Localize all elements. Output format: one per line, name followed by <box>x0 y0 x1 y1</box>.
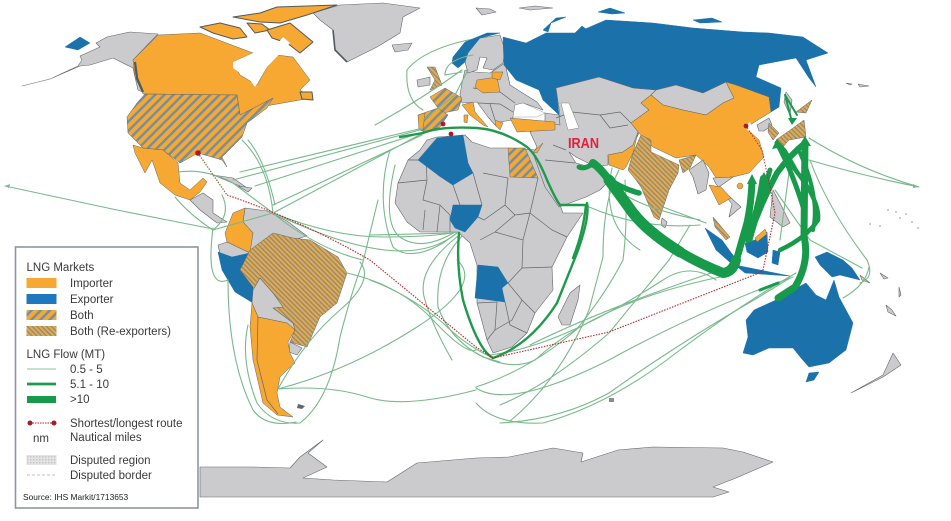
heading: LNG Markets: LNG Markets <box>26 262 94 274</box>
legend: flow over 10: >10 <box>70 394 90 406</box>
region: Oceania <box>609 209 919 402</box>
legend: disputed region: Disputed region <box>70 455 151 467</box>
legend: flow 5.1-10 <box>27 379 109 391</box>
legend: flow over 10 <box>27 394 90 406</box>
region: Russia <box>503 8 869 115</box>
legend: disputed border <box>27 470 152 482</box>
legend: nautical miles: Nautical miles <box>70 432 142 444</box>
region: Antarctica <box>200 440 773 497</box>
legend: exporter: Exporter <box>70 294 114 306</box>
legend: flow 5.1-10: 5.1 - 10 <box>70 379 109 391</box>
legend: nautical miles: nm <box>33 433 49 445</box>
legend: both: Both <box>70 310 94 322</box>
region: Africa <box>395 135 583 353</box>
shortest and longest route, dotted <box>198 126 775 358</box>
legend: both re-exporters <box>26 326 171 338</box>
flow arrowheads <box>5 118 919 188</box>
region: Asia <box>510 77 870 283</box>
legend panel <box>16 247 198 508</box>
source note: Source: IHS Markit/1713653 <box>23 492 129 502</box>
region: North America <box>22 3 420 223</box>
legend: importer: Importer <box>70 278 113 290</box>
legend: both re-exporters: Both (Re-exporters) <box>70 326 171 338</box>
LNG flow routes, thick over 10 MT <box>579 95 818 298</box>
region: Europe <box>417 6 553 132</box>
label: Iran: IRAN <box>568 136 599 152</box>
LNG flow routes, thin 0.5-5 MT <box>5 40 919 424</box>
legend: both <box>26 310 94 322</box>
region: South America <box>218 208 347 417</box>
legend: disputed region <box>26 455 151 467</box>
legend: exporter <box>26 294 114 306</box>
LNG flow routes, medium 5.1-10 MT <box>400 128 588 358</box>
legend: importer <box>26 278 113 290</box>
route end points <box>195 122 748 156</box>
legend: disputed border: Disputed border <box>70 470 152 482</box>
legend: nautical miles <box>33 432 142 445</box>
legend: flow 0.5-5: 0.5 - 5 <box>70 364 103 376</box>
legend: flow 0.5-5 <box>27 364 103 376</box>
heading: LNG Flow: LNG Flow (MT) <box>26 349 105 361</box>
legend: shortest/longest route: Shortest/longest route <box>70 418 183 430</box>
